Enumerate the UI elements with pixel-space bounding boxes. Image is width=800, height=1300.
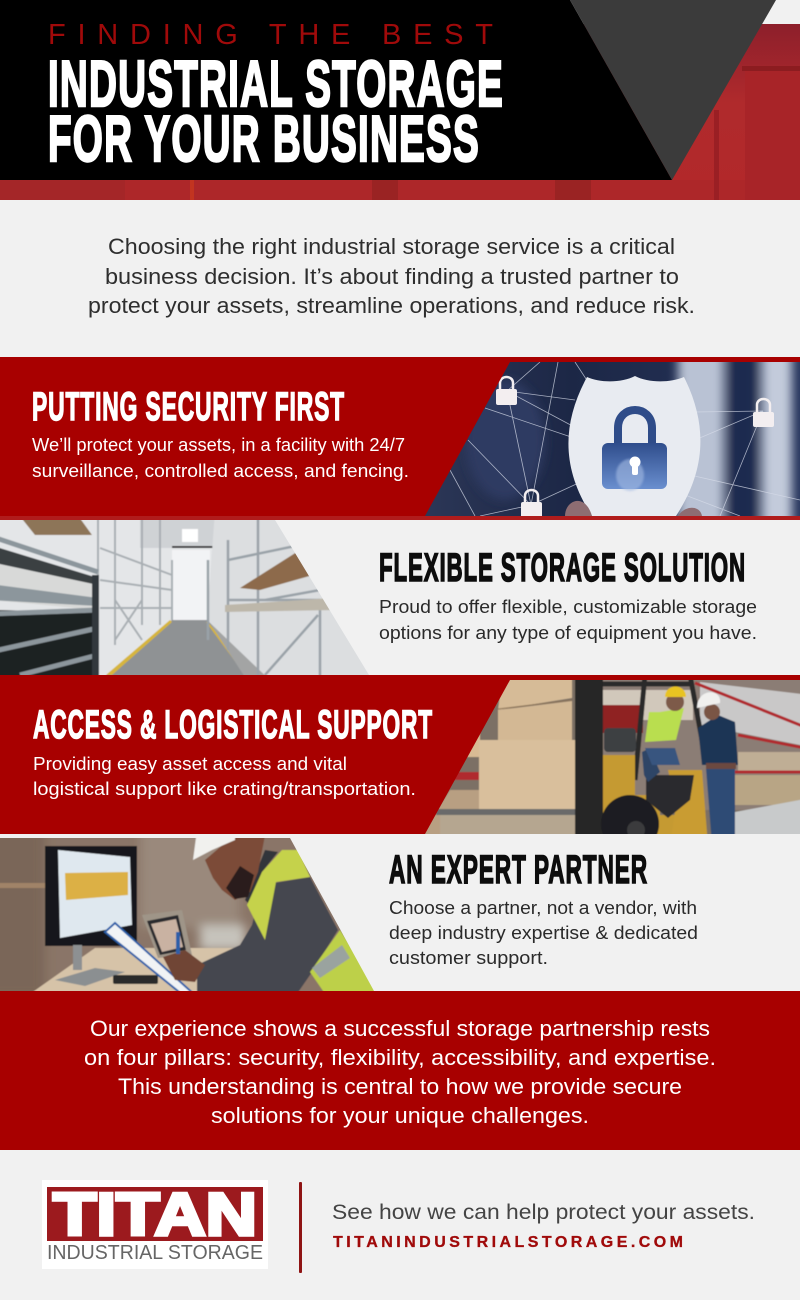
panel: expert partner (0, 838, 697, 991)
call to action (332, 1201, 755, 1251)
right wall and rack (208, 520, 369, 675)
logo: Titan Industrial Storage (42, 1180, 268, 1269)
forklift body (602, 754, 675, 834)
panel: access and logistics (0, 675, 800, 834)
tablet (142, 910, 192, 958)
panel: security (0, 357, 800, 516)
panel: flexible storage (0, 510, 800, 685)
body text (389, 898, 698, 968)
call to action: See how we can help protect your assets. (332, 1201, 755, 1224)
heading: PUTTING SECURITY FIRST (32, 385, 345, 429)
small padlocks (496, 377, 774, 518)
phone (113, 975, 158, 984)
body text: surveillance, controlled access, and fencing. (32, 461, 409, 481)
photo: worker at computer (0, 838, 374, 991)
left dark shelves (22, 520, 92, 536)
body text: We’ll protect your assets, in a facility with 24/7 (32, 435, 405, 455)
back shelving (700, 682, 800, 747)
closing statement band (0, 991, 800, 1150)
collar (245, 850, 278, 905)
hand (163, 950, 205, 982)
mast (575, 670, 603, 845)
header photo: red storage doors (0, 24, 800, 200)
body text: Providing easy asset access and vital (33, 754, 347, 774)
hi-vis vest (247, 850, 310, 940)
monitor (45, 846, 137, 946)
intro text (88, 234, 695, 318)
closing statement band: on four pillars: security, flexibility, accessibility, and expertise. (84, 1045, 716, 1070)
body text: customer support. (389, 948, 548, 968)
intro text: protect your assets, streamline operations, and reduce risk. (88, 293, 695, 318)
body text: Proud to offer flexible, customizable storage (379, 597, 757, 617)
closing statement band: solutions for your unique challenges. (211, 1103, 589, 1128)
eyebrow heading: FINDING THE BEST (48, 19, 493, 51)
website: TITANINDUSTRIALSTORAGE.COM (333, 1234, 683, 1251)
heading: ACCESS & LOGISTICAL SUPPORT (33, 703, 433, 747)
divider (299, 1182, 302, 1273)
clipboard (105, 923, 196, 996)
intro text: Choosing the right industrial storage service is a critical (108, 234, 675, 259)
main title: FOR YOUR BUSINESS (48, 102, 480, 175)
worker jacket (197, 877, 338, 1001)
closing statement band: Our experience shows a successful storage partnership rests (90, 1016, 710, 1041)
body text: deep industry expertise & dedicated (389, 923, 698, 943)
left stacked boxes (425, 790, 480, 834)
body text (33, 754, 416, 799)
boxes (498, 680, 573, 710)
closing statement band: This understanding is central to how we provide secure (118, 1074, 682, 1099)
grey triangle (570, 0, 776, 180)
body text (379, 597, 757, 643)
padlock (602, 410, 667, 491)
face (204, 838, 265, 900)
main title: INDUSTRIAL STORAGE (48, 47, 504, 120)
body text: options for any type of equipment you have. (379, 623, 757, 643)
shield (568, 376, 700, 516)
center racks (98, 510, 172, 645)
driver (642, 748, 660, 782)
fingers (565, 501, 592, 516)
second worker (698, 715, 738, 765)
body text: logistical support like crating/transportation. (33, 779, 416, 799)
logo: Titan Industrial Storage: TITAN (53, 1181, 257, 1248)
photo: warehouse racks (0, 520, 369, 675)
intro text: business decision. It’s about finding a trusted partner to (105, 264, 679, 289)
logo: Titan Industrial Storage: INDUSTRIAL STORAGE (47, 1242, 263, 1264)
photo: forklift in warehouse (425, 680, 800, 834)
desk (33, 947, 233, 991)
header banner (0, 0, 800, 200)
black title panel (0, 0, 672, 180)
main title (48, 47, 504, 175)
body text: Choose a partner, not a vendor, with (389, 898, 697, 918)
floor (106, 620, 244, 675)
photo: digital security shield (425, 362, 800, 516)
body text (32, 435, 409, 481)
